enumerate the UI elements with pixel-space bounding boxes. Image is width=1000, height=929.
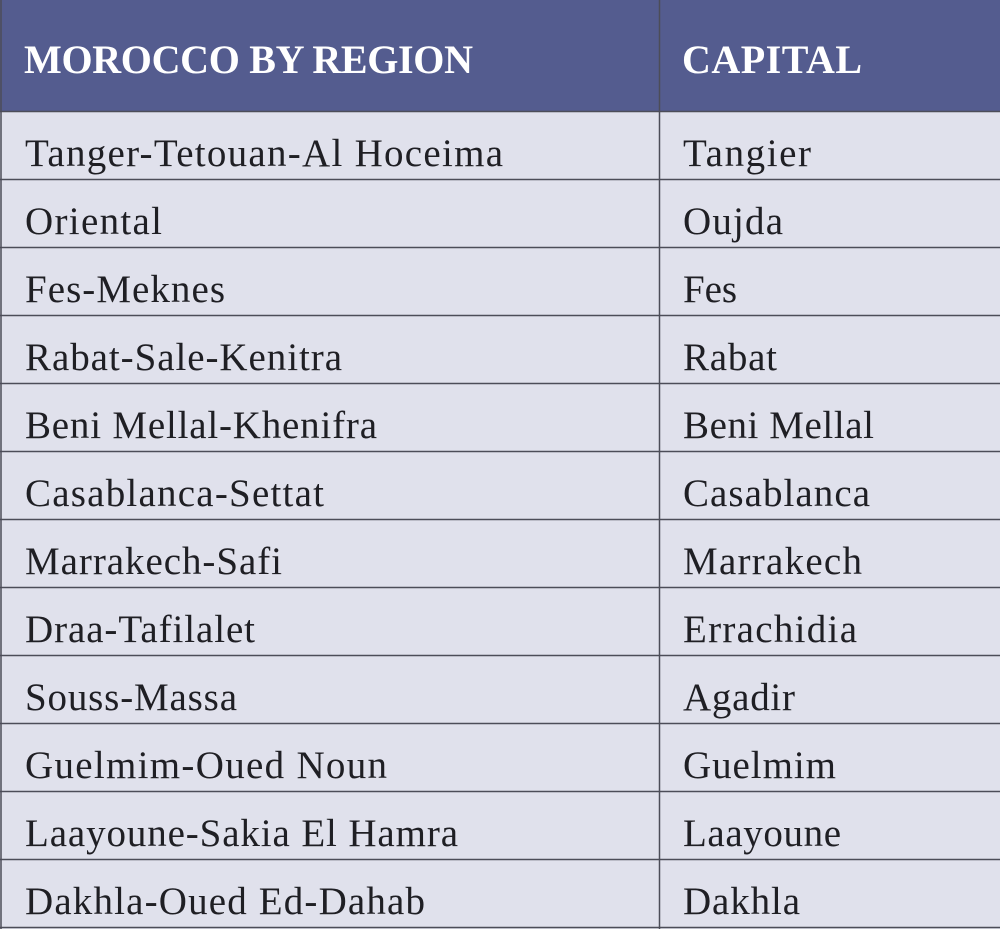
heading: capital column: CAPITAL	[682, 37, 862, 82]
row: Beni Mellal-Khenifra: Beni Mellal-Khenifra	[25, 404, 377, 447]
row: Fes-Meknes: Fes-Meknes	[25, 268, 225, 311]
row: Oriental: Oujda	[683, 200, 783, 243]
row: Draa-Tafilalet: Errachidia	[683, 608, 857, 651]
row: Rabat-Sale-Kenitra: Rabat	[683, 336, 777, 379]
row: Tanger-Tetouan-Al Hoceima: Tanger-Tetouan-Al Hoceima	[25, 132, 503, 175]
row: Oriental	[25, 200, 783, 243]
row: Souss-Massa	[25, 676, 795, 719]
row: Beni Mellal-Khenifra: Beni Mellal	[683, 404, 874, 447]
row: Casablanca-Settat: Casablanca-Settat	[25, 472, 324, 515]
row: Rabat-Sale-Kenitra: Rabat-Sale-Kenitra	[25, 336, 342, 379]
row: Guelmim-Oued Noun	[25, 744, 836, 787]
row: Laayoune-Sakia El Hamra: Laayoune-Sakia El Hamra	[25, 812, 458, 855]
row: Dakhla-Oued Ed-Dahab: Dakhla-Oued Ed-Dahab	[25, 880, 425, 923]
row: Tanger-Tetouan-Al Hoceima	[25, 132, 811, 175]
row: Guelmim-Oued Noun: Guelmim	[683, 744, 836, 787]
row: Casablanca-Settat	[25, 472, 870, 515]
header row	[0, 0, 1000, 111]
row: Marrakech-Safi: Marrakech	[683, 540, 862, 583]
row: Casablanca-Settat: Casablanca	[683, 472, 870, 515]
row: Souss-Massa: Agadir	[683, 676, 795, 719]
row: Tanger-Tetouan-Al Hoceima: Tangier	[683, 132, 811, 175]
row: Laayoune-Sakia El Hamra	[25, 812, 841, 855]
row: Fes-Meknes	[25, 268, 737, 311]
row: Dakhla-Oued Ed-Dahab: Dakhla	[683, 880, 800, 923]
row: Marrakech-Safi	[25, 540, 862, 583]
row: Souss-Massa: Souss-Massa	[25, 676, 237, 719]
row: Fes-Meknes: Fes	[683, 268, 737, 311]
row: Oriental: Oriental	[25, 200, 162, 243]
row: Beni Mellal-Khenifra	[25, 404, 874, 447]
row: Rabat-Sale-Kenitra	[25, 336, 777, 379]
row: Draa-Tafilalet	[25, 608, 857, 651]
row: Marrakech-Safi: Marrakech-Safi	[25, 540, 282, 583]
heading: region column: MOROCCO BY REGION	[24, 37, 473, 82]
row: Guelmim-Oued Noun: Guelmim-Oued Noun	[25, 744, 387, 787]
row: Laayoune-Sakia El Hamra: Laayoune	[683, 812, 841, 855]
row: Dakhla-Oued Ed-Dahab	[25, 880, 800, 923]
row: Draa-Tafilalet: Draa-Tafilalet	[25, 608, 255, 651]
